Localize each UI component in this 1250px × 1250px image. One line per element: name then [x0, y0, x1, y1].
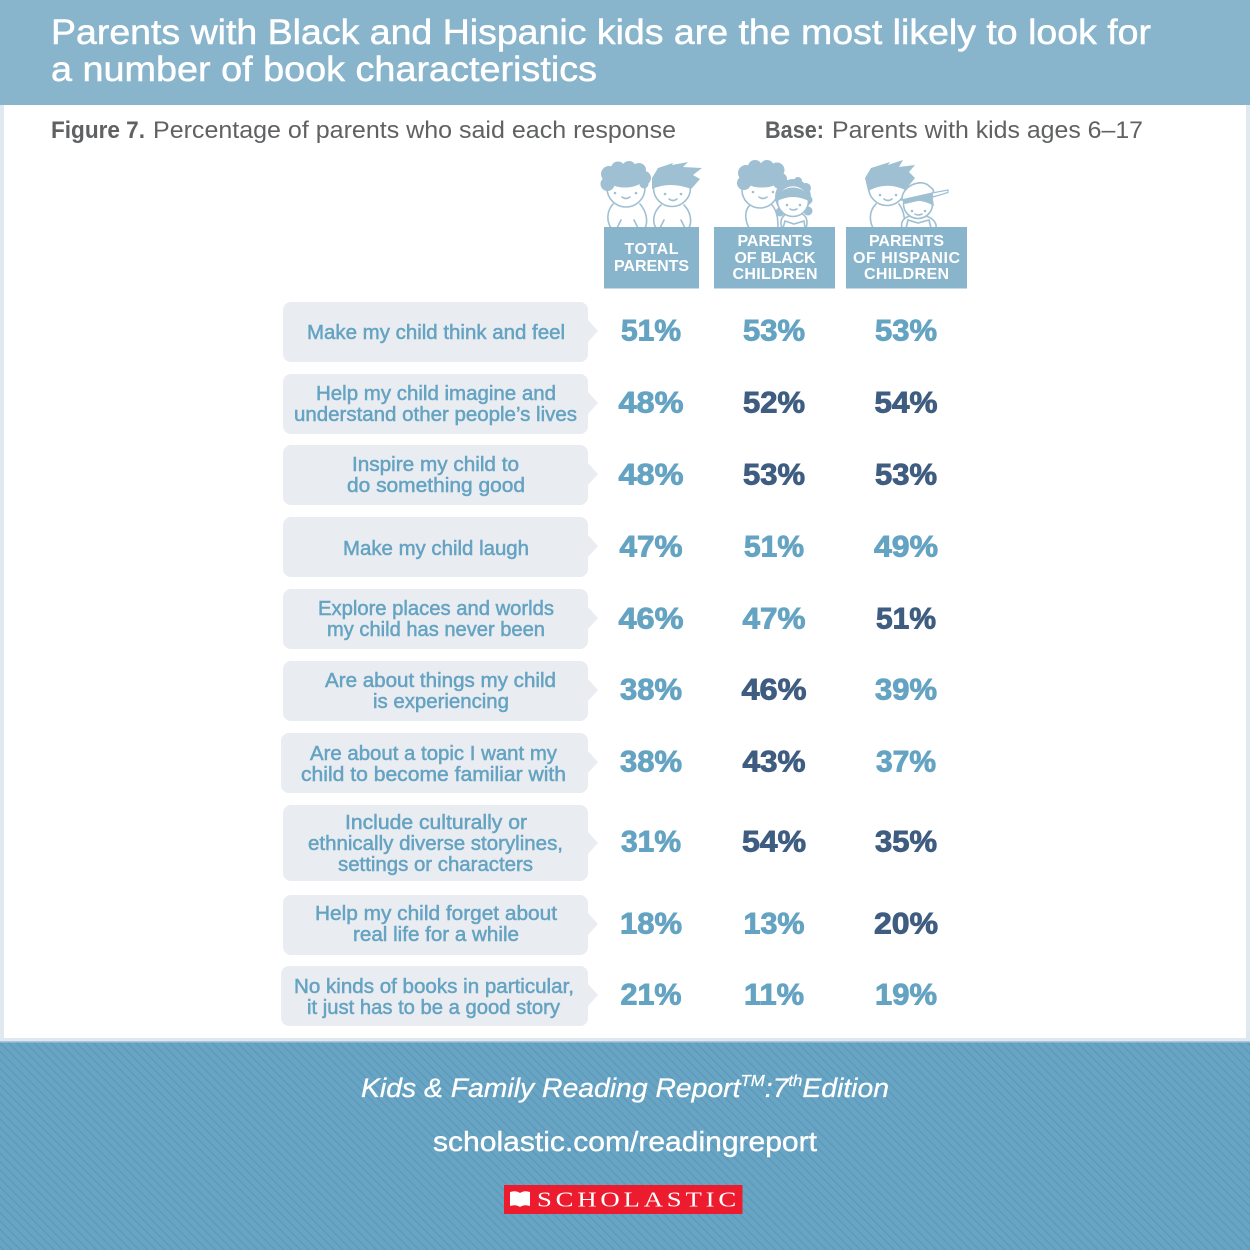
- label bubble: [283, 589, 598, 649]
- label bubble: Help my child forget about: [315, 903, 557, 925]
- report title: Edition: [802, 1073, 889, 1103]
- values: [620, 978, 937, 1011]
- label: parents of hispanic children: CHILDREN: [864, 266, 949, 283]
- row: things my child is experiencing: [283, 661, 937, 721]
- row: explore places and worlds: [283, 589, 936, 649]
- row: forget about real life: [283, 895, 938, 955]
- icon: open book: [510, 1191, 530, 1207]
- row: make my child think and feel: [283, 302, 937, 362]
- label bubble: Are about a topic I want my: [310, 743, 557, 765]
- values: 19%: [875, 978, 937, 1011]
- label: total parents: [604, 227, 699, 288]
- row: make my child laugh: [283, 517, 938, 577]
- values: 53%: [743, 314, 805, 347]
- label bubble: No kinds of books in particular,: [294, 976, 574, 998]
- label bubble: my child has never been: [327, 619, 545, 641]
- scholastic logo: SCHOLASTIC: [537, 1188, 740, 1212]
- label bubble: Include culturally or: [345, 812, 527, 834]
- label bubble: understand other people’s lives: [294, 404, 577, 426]
- title: [51, 13, 1151, 89]
- base note: Parents with kids ages 6–17: [832, 117, 1143, 144]
- label bubble: [283, 302, 598, 362]
- values: [618, 386, 938, 419]
- label: parents of hispanic children: [846, 227, 967, 288]
- values: 21%: [620, 978, 682, 1011]
- values: 51%: [876, 602, 936, 635]
- values: 53%: [875, 314, 937, 347]
- label bubble: Explore places and worlds: [318, 598, 554, 620]
- values: 13%: [744, 907, 804, 940]
- column header: total parents: [600, 161, 702, 288]
- values: 31%: [621, 825, 681, 858]
- values: 38%: [620, 673, 682, 706]
- header banner: [0, 0, 1250, 105]
- label: parents of black children: [714, 227, 835, 288]
- base note: Base:: [765, 117, 824, 144]
- values: 52%: [743, 386, 805, 419]
- report url: scholastic.com/readingreport: [433, 1126, 817, 1157]
- figure caption: Figure 7.: [51, 117, 145, 144]
- values: [621, 825, 937, 858]
- column header: parents of black children: [714, 160, 835, 288]
- values: 53%: [875, 458, 937, 491]
- title: Parents with Black and Hispanic kids are the most likely to look for: [51, 13, 1151, 52]
- values: 37%: [876, 745, 936, 778]
- label: total parents: PARENTS: [614, 258, 689, 275]
- label: parents of black children: PARENTS: [738, 233, 813, 250]
- values: 51%: [621, 314, 681, 347]
- label: parents of black children: OF BLACK: [734, 250, 816, 267]
- report title: :7: [765, 1073, 789, 1103]
- scholastic logo: [504, 1185, 742, 1214]
- values: 49%: [874, 530, 938, 563]
- values: 20%: [874, 907, 938, 940]
- title: a number of book characteristics: [51, 50, 597, 89]
- values: 11%: [744, 978, 804, 1011]
- values: 54%: [874, 386, 938, 419]
- values: [620, 530, 938, 563]
- row: imagine other people's lives: [283, 374, 938, 434]
- values: [620, 673, 937, 706]
- values: 48%: [618, 458, 684, 491]
- report title: th: [788, 1073, 802, 1090]
- label bubble: Inspire my child to: [352, 454, 519, 476]
- row: inspire something good: [283, 445, 937, 505]
- label bubble: Make my child laugh: [343, 538, 529, 560]
- label bubble: child to become familiar with: [301, 764, 566, 786]
- values: 18%: [620, 907, 682, 940]
- report title: Kids & Family Reading Report: [361, 1073, 723, 1103]
- footer band: [0, 1041, 1250, 1250]
- values: [620, 745, 936, 778]
- label: parents of black children: CHILDREN: [732, 266, 818, 283]
- row: no kinds of books in particular: [281, 966, 937, 1026]
- label bubble: [283, 661, 598, 721]
- icon: two children: [600, 161, 702, 228]
- label bubble: [281, 733, 598, 793]
- values: 51%: [744, 530, 804, 563]
- label bubble: [283, 445, 598, 505]
- label bubble: it just has to be a good story: [307, 997, 560, 1019]
- values: [621, 314, 937, 347]
- label bubble: settings or characters: [338, 854, 533, 876]
- values: [620, 907, 938, 940]
- values: 38%: [620, 745, 682, 778]
- label: parents of hispanic children: PARENTS: [869, 233, 944, 250]
- label bubble: Help my child imagine and: [316, 383, 556, 405]
- column header: parents of hispanic children: [846, 160, 967, 288]
- label bubble: do something good: [347, 475, 525, 497]
- icon: parent and girl: [737, 160, 812, 228]
- label bubble: [283, 805, 598, 881]
- values: [618, 458, 937, 491]
- label bubble: Make my child think and feel: [307, 322, 565, 344]
- row: topic I want my child to know: [281, 733, 936, 793]
- label bubble: real life for a while: [353, 924, 519, 946]
- values: 48%: [618, 386, 684, 419]
- label: total parents: TOTAL: [624, 241, 679, 258]
- label bubble: [283, 374, 598, 434]
- values: 47%: [620, 530, 682, 563]
- values: 46%: [742, 673, 806, 706]
- values: 43%: [742, 745, 806, 778]
- label: parents of hispanic children: OF HISPANIC: [853, 250, 960, 267]
- label bubble: [283, 517, 598, 577]
- label bubble: [283, 895, 598, 955]
- label bubble: [281, 966, 598, 1026]
- values: 54%: [742, 825, 806, 858]
- label bubble: Are about things my child: [325, 670, 556, 692]
- report title: TM: [740, 1073, 765, 1090]
- row: culturally diverse storylines: [283, 805, 937, 881]
- values: 39%: [875, 673, 937, 706]
- values: 53%: [743, 458, 805, 491]
- values: 47%: [742, 602, 806, 635]
- figure caption: Percentage of parents who said each response: [153, 117, 676, 144]
- values: [618, 602, 936, 635]
- values: 35%: [875, 825, 937, 858]
- values: 46%: [618, 602, 684, 635]
- icon: parent and boy with cap: [865, 160, 948, 228]
- label bubble: ethnically diverse storylines,: [308, 833, 563, 855]
- label bubble: is experiencing: [373, 691, 509, 713]
